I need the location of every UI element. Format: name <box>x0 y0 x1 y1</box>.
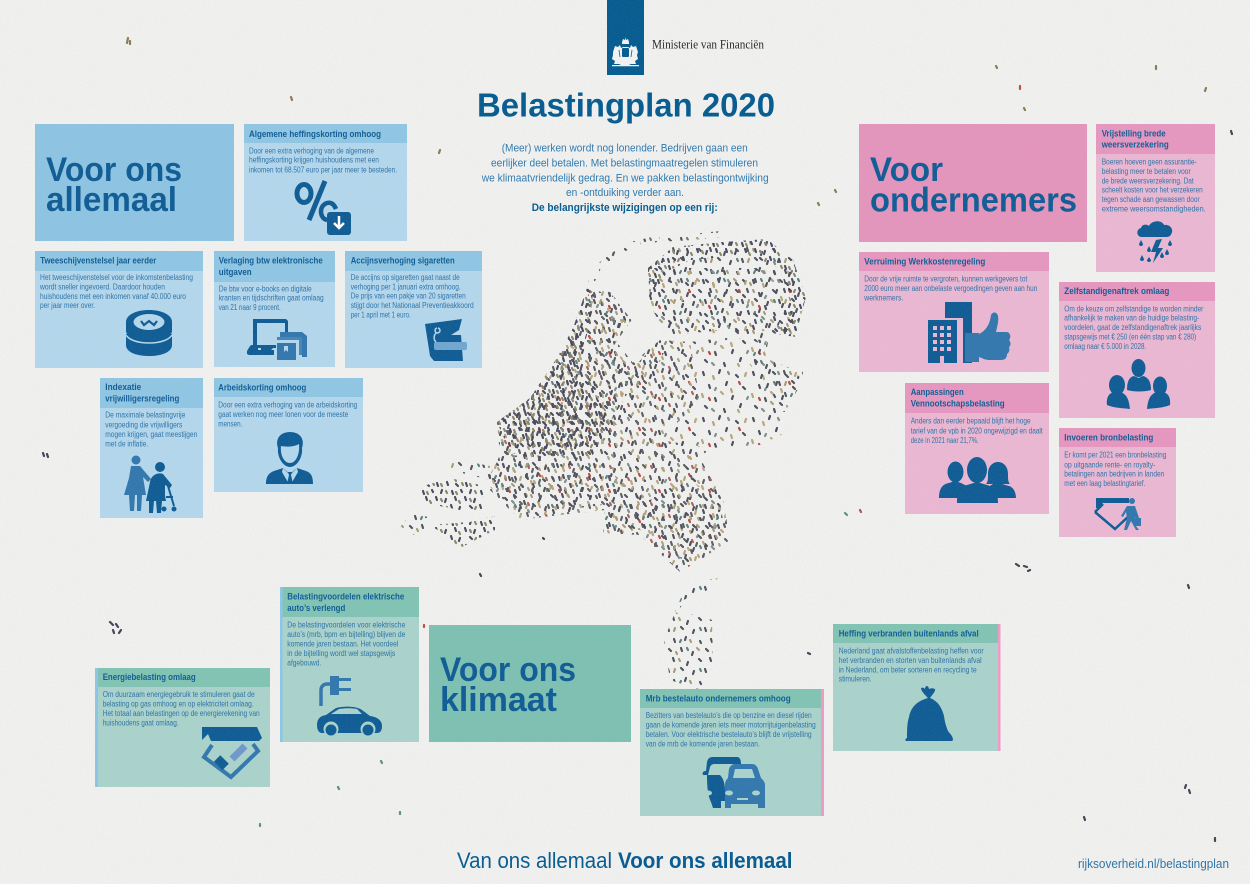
panel: Mrb bestelauto ondernemers omhoog: betalen. Voor elektrische bestelauto’s blijft de vrijstelling <box>646 730 812 739</box>
panel: Vrijstelling brede weersverzekering <box>1096 124 1215 272</box>
panel: Belastingvoordelen elektrische auto's <box>280 587 419 742</box>
logo: Rijksoverheid <box>607 0 644 75</box>
panel: Voor ons allemaal: Voor ons <box>46 151 182 189</box>
icon: buildings and thumb up <box>928 302 1010 364</box>
panel: Heffing verbranden buitenlands afval: stimuleren. <box>839 675 872 684</box>
panel: Mrb bestelauto ondernemers omhoog <box>640 689 824 816</box>
icon: storm cloud <box>1137 221 1172 263</box>
panel: Algemene heffingskorting omhoog: Algemene heffingskorting omhoog <box>249 129 381 140</box>
panel: Vrijstelling brede weersverzekering: Boeren hoeven geen assurantie- <box>1102 157 1197 166</box>
intro text: De belangrijkste wijzigingen op een rij: <box>532 202 718 214</box>
panel: Tweeschijvenstelsel jaar eerder: Tweeschijvenstelsel jaar eerder <box>40 256 157 267</box>
panel: Zelfstandigenaftrek omlaag: voordelen, gaat de zelfstandigenaftrek jaarlijks <box>1064 323 1201 332</box>
panel: Vrijstelling brede weersverzekering: de brede weersverzekering. Dat <box>1102 176 1194 185</box>
panel: Invoeren bronbelasting: Invoeren bronbelasting <box>1064 432 1153 443</box>
panel: Mrb bestelauto ondernemers omhoog: Mrb bestelauto ondernemers omhoog <box>646 694 791 705</box>
panel: Vrijstelling brede weersverzekering: Vrijstelling brede <box>1102 129 1166 140</box>
panel: Verruiming Werkkostenregeling: Verruiming Werkkostenregeling <box>864 256 985 267</box>
panel: Energiebelasting omlaag: Energiebelasting omlaag <box>103 672 196 683</box>
panel: Tweeschijvenstelsel jaar eerder <box>35 251 203 368</box>
crowd map of the Netherlands <box>400 234 806 690</box>
panel: Aanpassingen Vennootschapsbelasting: tarief van de vpb in 2020 ongewijzigd en daalt <box>911 426 1043 435</box>
panel: Belastingvoordelen elektrische auto's: in de bijtelling wordt wel stapsgewijs <box>287 649 395 658</box>
panel: Arbeidskorting omhoog: gaat werken nog meer lonen voor de meeste <box>218 410 349 419</box>
panel: Belastingvoordelen elektrische auto's: afgebouwd. <box>287 658 321 667</box>
icon: volunteer with elderly person <box>124 456 176 513</box>
panel: Vrijstelling brede weersverzekering: weersverzekering <box>1101 140 1169 151</box>
panel: Voor ondernemers: Voor <box>870 151 943 189</box>
panel: Algemene heffingskorting omhoog: inkomen tot 68.507 euro per jaar meer te besteden. <box>249 165 397 174</box>
panel: Aanpassingen Vennootschapsbelasting: Vennootschapsbelasting <box>911 398 1005 409</box>
panel: Heffing verbranden buitenlands afval: het verbranden en storten van buitenlands afval <box>839 656 982 665</box>
panel: Tweeschijvenstelsel jaar eerder: Het tweeschijvenstelsel voor de inkomstenbelasting <box>40 273 193 282</box>
panel: Voor ondernemers <box>859 124 1087 242</box>
intro text: eerlijker deel betalen. Met belastingmaatregelen stimuleren <box>491 158 758 170</box>
footer slogan: Voor ons allemaal <box>618 848 792 873</box>
icon: businessman <box>266 432 313 484</box>
panel: Belastingvoordelen elektrische auto's: auto’s (mrb, bpm en bijtelling) blijven de <box>287 630 406 639</box>
icon: percent down <box>297 181 351 235</box>
intro text <box>481 143 769 214</box>
panel: Heffing verbranden buitenlands afval: Nederland gaat afvalstoffenbelasting heffen voor <box>839 647 984 656</box>
panel: Mrb bestelauto ondernemers omhoog: Bezitters van bestelauto’s die op benzine en diesel rijden <box>646 711 812 720</box>
panel: Belastingvoordelen elektrische auto's: auto’s verlengd <box>287 603 345 614</box>
panel: Verruiming Werkkostenregeling: Door de vrije ruimte te vergroten, kunnen werkgevers tot <box>864 274 1028 283</box>
panel: Arbeidskorting omhoog: mensen. <box>218 419 242 428</box>
footer url: rijksoverheid.nl/belastingplan <box>1078 856 1229 871</box>
panel: Zelfstandigenaftrek omlaag: Zelfstandigenaftrek omlaag <box>1064 286 1169 297</box>
panel: Verlaging btw elektronische uitgaven: kranten en tijdschriften gaat omlaag <box>219 294 324 303</box>
panel: Accijnsverhoging sigaretten: verhoging per 1 januari extra omhoog. <box>351 282 461 291</box>
panel: Voor ons allemaal: allemaal <box>46 181 177 219</box>
panel: Verlaging btw elektronische uitgaven: uitgaven <box>219 267 252 278</box>
panel: Energiebelasting omlaag: huishoudens gaat omlaag. <box>103 719 179 728</box>
panel: Accijnsverhoging sigaretten: per 1 april met 1 euro. <box>351 310 411 319</box>
ministry name: Ministerie van Financiën <box>652 38 765 52</box>
panel: Verlaging btw elektronische uitgaven: Verlaging btw elektronische <box>219 256 323 267</box>
panel: Invoeren bronbelasting: betalingen aan bedrijven in landen <box>1064 470 1164 479</box>
panel: Voor ondernemers: ondernemers <box>870 182 1077 220</box>
panel: Verruiming Werkkostenregeling: werknemers. <box>863 293 903 302</box>
panel: Vrijstelling brede weersverzekering: tegen schade aan gewassen door <box>1102 195 1200 204</box>
panel: Invoeren bronbelasting <box>1059 428 1176 537</box>
panel: Voor ons klimaat: klimaat <box>440 681 557 719</box>
panel: Aanpassingen Vennootschapsbelasting: Anders dan eerder bepaald blijft het hoge <box>911 417 1031 426</box>
panel: Heffing verbranden buitenlands afval: in Nederland, om beter sorteren en recycling te <box>839 665 977 674</box>
panel: Aanpassingen Vennootschapsbelasting: Aanpassingen <box>911 387 964 398</box>
intro text: (Meer) werken wordt nog lonender. Bedrijven gaan een <box>502 143 748 155</box>
panel: Indexatie vrijwilligersregeling: vrijwilligersregeling <box>105 394 179 405</box>
panel: Energiebelasting omlaag: belasting op gas omhoog en op elektriciteit omlaag. <box>103 700 254 709</box>
panel: Verlaging btw elektronische uitgaven <box>214 251 335 367</box>
title: Belastingplan 2020 <box>477 87 775 124</box>
icon: energy bill envelope <box>202 727 262 777</box>
panel: Heffing verbranden buitenlands afval: Heffing verbranden buitenlands afval <box>839 629 979 640</box>
panel: Invoeren bronbelasting: Er komt per 2021 een bronbelasting <box>1064 451 1166 460</box>
panel: Arbeidskorting omhoog: Arbeidskorting omhoog <box>218 383 306 394</box>
panel: Aanpassingen Vennootschapsbelasting: deze in 2021 naar 21,7%. <box>911 436 979 445</box>
panel: Zelfstandigenaftrek omlaag <box>1059 282 1215 418</box>
intro text: en -ontduiking verder aan. <box>566 187 684 199</box>
panel: Aanpassingen Vennootschapsbelasting <box>905 383 1049 514</box>
panel: Indexatie vrijwilligersregeling: vergoeding die vrijwilligers <box>105 420 182 429</box>
panel: Invoeren bronbelasting: op uitgaande rente- en royalty- <box>1064 460 1156 469</box>
panel: Belastingvoordelen elektrische auto's: komende jaren bestaan. Het voordeel <box>287 639 398 648</box>
icon: group of three <box>939 457 1016 503</box>
panel: Zelfstandigenaftrek omlaag: afhankelijk te maken van de huidige belasting- <box>1064 314 1200 323</box>
icon: van and car <box>703 757 765 808</box>
panel: Invoeren bronbelasting: met een laag belastingtarief. <box>1064 479 1145 488</box>
panel: Verruiming Werkkostenregeling <box>859 252 1049 372</box>
icon: plug and electric car <box>317 676 382 736</box>
panel: Verruiming Werkkostenregeling: 2000 euro meer aan onbelaste vergoedingen geven aan hun <box>864 284 1037 293</box>
icon: cigarette pack <box>425 319 467 361</box>
panel: Arbeidskorting omhoog <box>214 378 363 492</box>
panel: Energiebelasting omlaag: Om duurzaam energiegebruik te stimuleren gaat de <box>103 690 255 699</box>
panel: Tweeschijvenstelsel jaar eerder: per jaar meer over. <box>40 301 95 310</box>
panel: Indexatie vrijwilligersregeling <box>100 378 203 518</box>
panel: Vrijstelling brede weersverzekering: extreme weersomstandigheden. <box>1102 205 1206 214</box>
panel: Accijnsverhoging sigaretten: stijgt door het Nationaal Preventieakkoord <box>351 301 474 310</box>
icon: laptop and books <box>247 319 307 360</box>
panel: Mrb bestelauto ondernemers omhoog: van de mrb de komende jaren bestaan. <box>646 739 760 748</box>
panel: Verlaging btw elektronische uitgaven: De btw voor e-books en digitale <box>219 285 312 294</box>
panel: Zelfstandigenaftrek omlaag: Om de keuze om zelfstandige te worden minder <box>1064 304 1204 313</box>
panel: Mrb bestelauto ondernemers omhoog: gaan de komende jaren iets meer motorrijtuigenbelasting <box>646 721 816 730</box>
panel: Voor ons allemaal <box>35 124 234 241</box>
intro text: we klimaatvriendelijk gedrag. En we pakken belastingontwijking <box>481 172 769 184</box>
panel: Energiebelasting omlaag <box>95 668 270 787</box>
panel: Algemene heffingskorting omhoog: Door een extra verhoging van de algemene <box>249 146 374 156</box>
panel: Algemene heffingskorting omhoog <box>244 124 407 241</box>
icon: envelope and traveller <box>1095 498 1141 530</box>
icon: coin stack <box>126 310 172 356</box>
panel: Energiebelasting omlaag: Het totaal aan belastingen op de energierekening van <box>103 709 260 718</box>
panel: Voor ons klimaat: Voor ons <box>440 651 576 689</box>
panel: Belastingvoordelen elektrische auto's: De belastingvoordelen voor elektrische <box>287 621 406 630</box>
panel: Zelfstandigenaftrek omlaag: omlaag naar € 5.000 in 2028. <box>1064 342 1146 351</box>
footer slogan: Van ons allemaal <box>457 848 612 873</box>
panel: Accijnsverhoging sigaretten: De prijs van een pakje van 20 sigaretten <box>351 292 466 301</box>
panel: Belastingvoordelen elektrische auto's: Belastingvoordelen elektrische <box>287 592 404 603</box>
icon: garbage bag <box>905 686 953 741</box>
panel: Indexatie vrijwilligersregeling: met de inflatie. <box>105 440 148 449</box>
panel: Heffing verbranden buitenlands afval <box>833 624 1000 751</box>
panel: Indexatie vrijwilligersregeling: mogen krijgen, gaat meestijgen <box>105 430 197 439</box>
panel: Vrijstelling brede weersverzekering: scheelt kosten voor het verzekeren <box>1102 186 1203 195</box>
panel: Zelfstandigenaftrek omlaag: stapsgewijs met € 250 (en één stap van € 280) <box>1064 332 1197 341</box>
panel: Algemene heffingskorting omhoog: heffingskorting krijgen huishoudens met een <box>249 156 379 165</box>
panel: Voor ons klimaat <box>429 625 631 742</box>
panel: Tweeschijvenstelsel jaar eerder: huishoudens met een inkomen vanaf 40.000 euro <box>40 292 187 301</box>
panel: Tweeschijvenstelsel jaar eerder: wordt sneller ingevoerd. Daardoor houden <box>39 282 165 292</box>
panel: Indexatie vrijwilligersregeling: Indexatie <box>105 382 141 393</box>
panel: Indexatie vrijwilligersregeling: De maximale belastingvrije <box>105 411 186 420</box>
icon: three people around <box>1107 359 1170 409</box>
panel: Accijnsverhoging sigaretten <box>345 251 482 368</box>
panel: Arbeidskorting omhoog: Door een extra verhoging van de arbeidskorting <box>218 400 357 409</box>
panel: Accijnsverhoging sigaretten: De accijns op sigaretten gaat naast de <box>351 273 460 282</box>
panel: Vrijstelling brede weersverzekering: belasting meer te betalen voor <box>1102 167 1191 176</box>
panel: Verlaging btw elektronische uitgaven: van 21 naar 9 procent. <box>219 303 281 312</box>
panel: Accijnsverhoging sigaretten: Accijnsverhoging sigaretten <box>351 256 455 267</box>
